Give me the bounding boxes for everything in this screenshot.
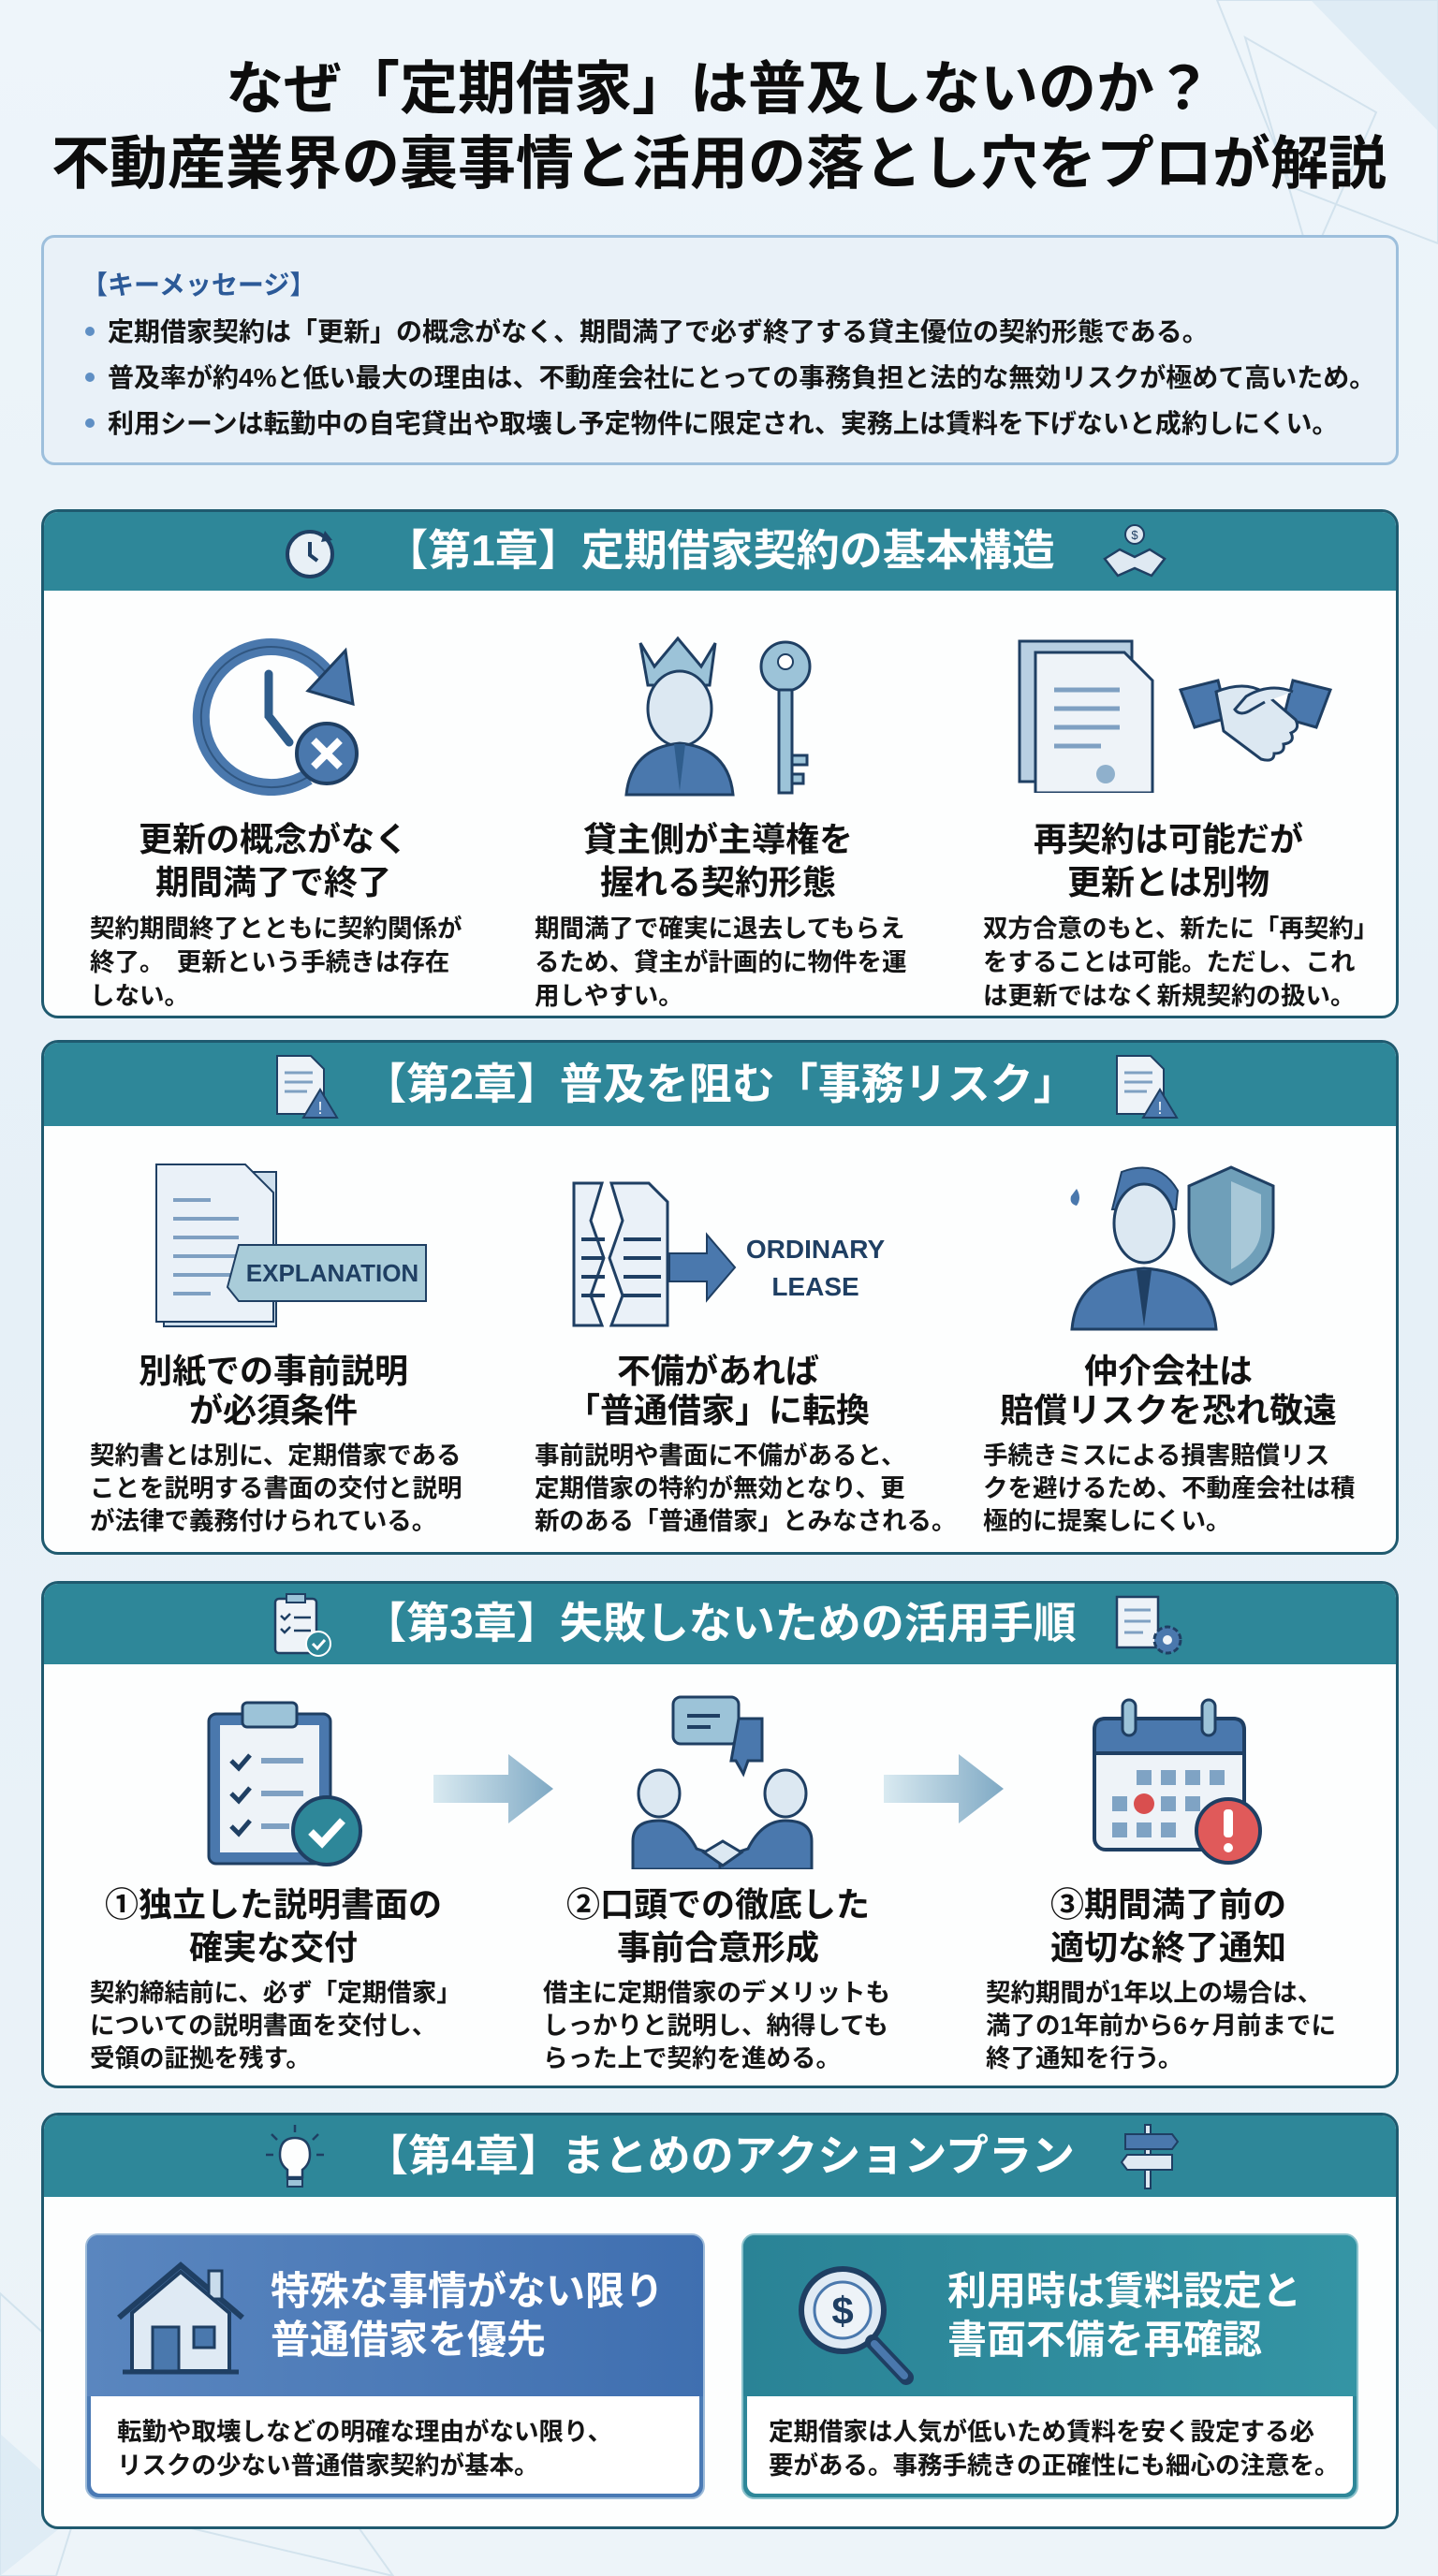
step2 heading: 事前合意形成 bbox=[617, 1928, 819, 1967]
col1 heading: が必須条件 bbox=[189, 1391, 358, 1429]
col3 heading bbox=[1000, 1352, 1337, 1429]
key message bullets: 普及率が約4%と低い最大の理由は、不動産会社にとっての事務負担と法的な無効リスクが極めて高いため。 bbox=[108, 363, 1375, 392]
title bbox=[51, 57, 1387, 197]
arrow 1 bbox=[433, 1754, 553, 1823]
chapter 2 header bbox=[44, 1043, 1396, 1126]
col1 icon: explanation document bbox=[155, 1164, 427, 1327]
col3 body: クを避けるため、不動産会社は積 bbox=[983, 1474, 1356, 1502]
col2 icon: broken document to ordinary lease: LEASE bbox=[771, 1272, 859, 1301]
col2 body: 新のある「普通借家」とみなされる。 bbox=[535, 1507, 957, 1535]
col1 icon: clock with x bbox=[193, 638, 359, 796]
icon: document warning right bbox=[1116, 1055, 1179, 1119]
card body bbox=[769, 2415, 1339, 2482]
card: recheck rent and documents bbox=[741, 2233, 1358, 2499]
key message bullets: 定期借家契約は「更新」の概念がなく、期間満了で必ず終了する貸主優位の契約形態である。 bbox=[108, 317, 1209, 346]
col1 heading bbox=[139, 820, 408, 901]
col2 heading: 不備があれば bbox=[617, 1352, 819, 1390]
chapter 3 header: 【第3章】失敗しないための活用手順 bbox=[363, 1599, 1077, 1647]
step3 icon: calendar alert bbox=[1093, 1698, 1262, 1865]
col3 heading: 仲介会社は bbox=[1084, 1352, 1253, 1390]
col1 heading: 更新の概念がなく bbox=[139, 820, 408, 858]
col1 body bbox=[90, 1442, 462, 1535]
icon: signpost bbox=[1120, 2124, 1180, 2189]
step3 body bbox=[986, 1979, 1336, 2072]
col2 icon: broken document to ordinary lease bbox=[573, 1181, 885, 1327]
icon: house bbox=[117, 2261, 244, 2374]
col3 body: 極的に提案しにくい。 bbox=[983, 1507, 1230, 1535]
icon: checklist bbox=[273, 1593, 331, 1657]
col3 body: をすることは可能。ただし、これ bbox=[983, 948, 1356, 976]
chapter 2 header: 【第2章】普及を阻む「事務リスク」 bbox=[363, 1060, 1077, 1108]
step3 body: 終了通知を行う。 bbox=[986, 2044, 1182, 2072]
step2 heading: ②口頭での徹底した bbox=[566, 1885, 870, 1924]
step1 heading: 確実な交付 bbox=[189, 1928, 358, 1967]
col3 heading bbox=[1034, 820, 1303, 901]
col1 icon: explanation document: EXPLANATION bbox=[246, 1259, 418, 1287]
col1 body: ことを説明する書面の交付と説明 bbox=[90, 1474, 462, 1502]
step3 body: 契約期間が1年以上の場合は、 bbox=[986, 1979, 1322, 2007]
step2 icon: meeting handshake bbox=[631, 1696, 813, 1869]
col3 body bbox=[983, 915, 1378, 1010]
col2 body bbox=[535, 1442, 957, 1535]
icon: clock bbox=[286, 530, 334, 578]
chapter 1 header bbox=[44, 512, 1396, 591]
col1 heading: 期間満了で終了 bbox=[155, 863, 391, 901]
col3 heading: 再契約は可能だが bbox=[1034, 820, 1303, 858]
card heading bbox=[271, 2267, 664, 2364]
panel: chapter 2 bbox=[41, 1040, 1399, 1555]
col3 body bbox=[983, 1442, 1356, 1535]
icon: light bulb bbox=[266, 2125, 324, 2188]
col1 heading: 別紙での事前説明 bbox=[139, 1352, 408, 1390]
col1 body: が法律で義務付けられている。 bbox=[90, 1507, 436, 1535]
chapter 1 header: 【第1章】定期借家契約の基本構造 bbox=[385, 526, 1055, 575]
col3 body: 双方合意のもと、新たに「再契約」 bbox=[983, 915, 1378, 943]
card body: リスクの少ない普通借家契約が基本。 bbox=[117, 2452, 539, 2480]
key message bullets: 利用シーンは転勤中の自宅貸出や取壊し予定物件に限定され、実務上は賃料を下げないと成約しにくい。 bbox=[108, 409, 1338, 438]
icon: magnifier dollar bbox=[794, 2261, 916, 2393]
card heading: 利用時は賃料設定と bbox=[947, 2269, 1301, 2313]
col2 icon: broken document to ordinary lease: ORDINARY bbox=[746, 1235, 885, 1264]
col2 heading: 貸主側が主導権を bbox=[583, 820, 853, 858]
key message box bbox=[41, 235, 1399, 465]
col1 body: しない。 bbox=[90, 982, 189, 1010]
step3 heading: ③期間満了前の bbox=[1050, 1885, 1286, 1924]
col3 heading: 更新とは別物 bbox=[1067, 863, 1269, 901]
icon: handshake money: $ bbox=[1131, 528, 1138, 542]
title: 不動産業界の裏事情と活用の落とし穴をプロが解説 bbox=[51, 132, 1387, 197]
arrow 2 bbox=[884, 1754, 1004, 1823]
col2 heading bbox=[566, 1352, 870, 1429]
card heading: 特殊な事情がない限り bbox=[271, 2269, 664, 2313]
icon: document gear bbox=[1116, 1595, 1181, 1655]
step2 body: らった上で契約を進める。 bbox=[543, 2044, 841, 2072]
col1 body: 終了。 更新という手続きは存在 bbox=[90, 948, 449, 976]
step3 heading bbox=[1050, 1885, 1286, 1967]
col3 icon: worried agent with shield bbox=[1070, 1165, 1275, 1331]
col3 heading: 賠償リスクを恐れ敬遠 bbox=[1000, 1391, 1337, 1429]
card body bbox=[117, 2415, 612, 2482]
step3 heading: 適切な終了通知 bbox=[1050, 1928, 1286, 1967]
card body: 要がある。事務手続きの正確性にも細心の注意を。 bbox=[769, 2452, 1339, 2480]
col2 body: 用しやすい。 bbox=[535, 982, 683, 1010]
col2 body: 期間満了で確実に退去してもらえ bbox=[535, 915, 904, 943]
step1 body: についての説明書面を交付し、 bbox=[90, 2012, 436, 2040]
col3 body: 手続きミスによる損害賠償リス bbox=[983, 1442, 1329, 1470]
icon: document warning bbox=[276, 1055, 339, 1119]
col2 body: 定期借家の特約が無効となり、更 bbox=[535, 1474, 905, 1502]
step2 body bbox=[543, 1979, 890, 2072]
icon: handshake money bbox=[1103, 524, 1167, 577]
col2 body: るため、貸主が計画的に物件を運 bbox=[535, 948, 906, 976]
col1 body: 契約期間終了とともに契約関係が bbox=[90, 915, 462, 943]
step2 body: 借主に定期借家のデメリットも bbox=[543, 1979, 890, 2007]
step1 heading bbox=[105, 1885, 442, 1967]
icon: document warning right: ! bbox=[1157, 1099, 1163, 1118]
card heading: 書面不備を再確認 bbox=[947, 2318, 1262, 2362]
step1 heading: ①独立した説明書面の bbox=[105, 1885, 442, 1924]
title: なぜ「定期借家」は普及しないのか？ bbox=[226, 57, 1212, 122]
step1 icon: clipboard check bbox=[208, 1702, 362, 1866]
icon: magnifier dollar: $ bbox=[831, 2289, 854, 2333]
icon: document warning: ! bbox=[317, 1099, 323, 1118]
step1 body: 契約締結前に、必ず「定期借家」 bbox=[90, 1979, 462, 2007]
col2 heading: 「普通借家」に転換 bbox=[566, 1391, 870, 1429]
panel: chapter 4 bbox=[41, 2113, 1399, 2529]
panel: chapter 3 bbox=[41, 1581, 1399, 2088]
card: prefer ordinary lease bbox=[85, 2233, 705, 2499]
col1 body: 契約書とは別に、定期借家である bbox=[90, 1442, 461, 1470]
card body: 転勤や取壊しなどの明確な理由がない限り、 bbox=[117, 2418, 612, 2446]
step2 heading bbox=[566, 1885, 870, 1967]
card heading bbox=[947, 2267, 1301, 2364]
key message bullets bbox=[85, 317, 1375, 438]
step3 body: 満了の1年前から6ヶ月前までに bbox=[986, 2012, 1336, 2040]
col1 heading bbox=[139, 1352, 408, 1429]
panel: chapter 1 bbox=[41, 509, 1399, 1018]
chapter 3 header bbox=[44, 1584, 1396, 1664]
col3 icon: documents and handshake bbox=[1019, 640, 1332, 793]
card heading: 普通借家を優先 bbox=[271, 2318, 546, 2362]
card body: 定期借家は人気が低いため賃料を安く設定する必 bbox=[769, 2418, 1314, 2446]
col2 heading bbox=[583, 820, 853, 901]
key message heading: 【キーメッセージ】 bbox=[81, 271, 315, 300]
col3 body: は更新ではなく新規契約の扱い。 bbox=[983, 982, 1356, 1010]
step1 body: 受領の証拠を残す。 bbox=[90, 2044, 311, 2072]
chapter 4 header: 【第4章】まとめのアクションプラン bbox=[365, 2131, 1075, 2180]
col2 icon: crowned landlord and key bbox=[624, 637, 811, 796]
chapter 4 header bbox=[44, 2115, 1396, 2197]
step2 body: しっかりと説明し、納得しても bbox=[543, 2012, 888, 2040]
step1 body bbox=[90, 1979, 462, 2072]
col1 body bbox=[90, 915, 462, 1010]
col2 body: 事前説明や書面に不備があると、 bbox=[535, 1442, 905, 1470]
col2 heading: 握れる契約形態 bbox=[600, 863, 836, 901]
col2 body bbox=[535, 915, 906, 1010]
